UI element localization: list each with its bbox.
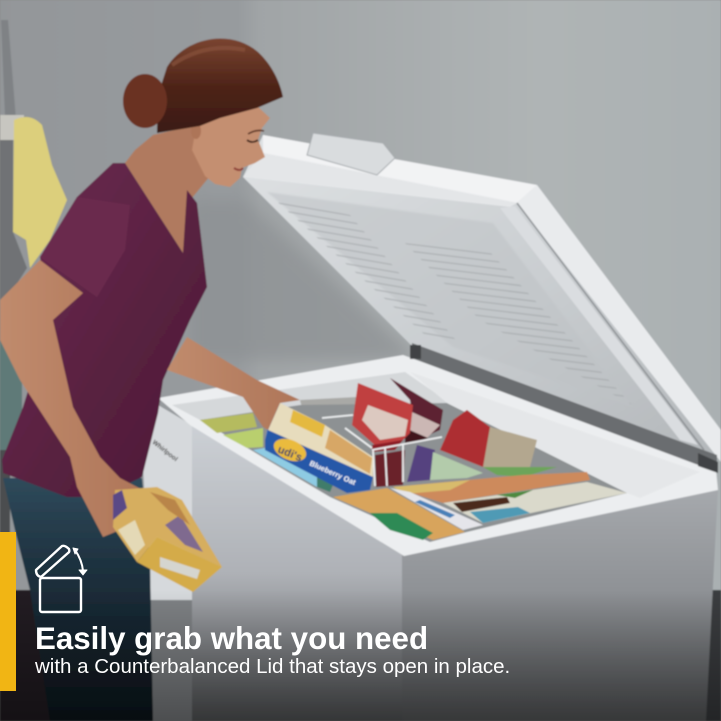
lid hinge strip <box>412 343 717 472</box>
towel and rail <box>0 20 67 310</box>
facial features <box>191 123 264 170</box>
freezer side panel: Whirlpool <box>151 439 179 463</box>
bottom dark gradient <box>0 590 721 721</box>
blueberry box <box>268 403 373 477</box>
hair <box>123 39 283 133</box>
freezer front faces <box>192 425 718 721</box>
open lid <box>243 133 721 473</box>
wire basket <box>322 415 442 486</box>
stacked boxes <box>393 472 590 503</box>
sleeve <box>40 197 130 297</box>
bags <box>390 378 443 440</box>
hand box <box>113 487 222 592</box>
right arm <box>167 337 300 430</box>
neck <box>125 125 215 253</box>
lid ribs <box>278 202 623 396</box>
left arm <box>0 260 143 537</box>
yellow accent bar <box>0 532 16 691</box>
freezer food contents <box>200 378 627 540</box>
jeans <box>3 478 153 721</box>
freezer food contents: Blueberry Oat <box>308 459 358 487</box>
heading: Easily grab what you need <box>35 621 428 656</box>
freezer side panel <box>143 405 192 721</box>
woman <box>0 39 300 721</box>
freezer food contents: udi's <box>276 444 304 464</box>
shirt <box>2 163 207 497</box>
subheading: with a Counterbalanced Lid that stays open in place. <box>35 655 510 678</box>
icon: open lid box <box>36 546 87 612</box>
face profile <box>192 104 270 187</box>
lid handle <box>307 133 395 175</box>
freezer rim and interior <box>158 355 718 556</box>
